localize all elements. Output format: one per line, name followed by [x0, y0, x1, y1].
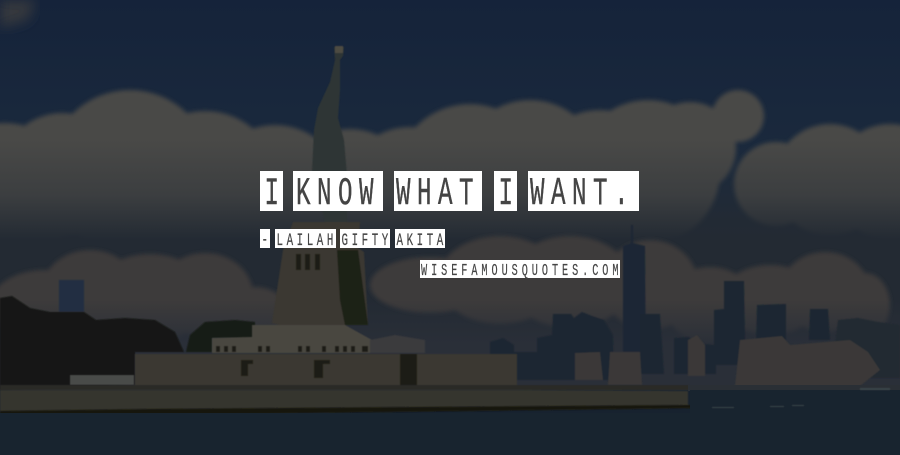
- upper cloud bank: [0, 90, 764, 267]
- website watermark: WISEFAMOUSQUOTES.COM: [421, 262, 622, 281]
- pale waterfront buildings: [575, 335, 880, 386]
- harbor strip beneath the skyline: [688, 385, 900, 391]
- quote word: I: I: [264, 172, 279, 216]
- lower middle cloud: [370, 236, 698, 330]
- author attribution: [260, 229, 447, 251]
- star fort wall: [135, 354, 517, 387]
- background: upper clouds: [0, 90, 900, 267]
- quote word: KNOW: KNOW: [296, 172, 380, 216]
- statue figure and torch: [312, 47, 347, 222]
- mid sky band beneath the upper clouds: [0, 240, 900, 390]
- lower cloud base shading: [0, 300, 900, 345]
- distant skyline: [59, 225, 900, 386]
- author word: GIFTY: GIFTY: [342, 232, 392, 251]
- quote word: I: [494, 171, 517, 216]
- quote word: WANT.: WANT.: [530, 172, 635, 216]
- cloud base shading: [0, 140, 900, 240]
- quote word: I: [260, 171, 283, 216]
- one world trade tower: [623, 225, 646, 372]
- terrace windows: [216, 346, 368, 352]
- background: lower clouds: [0, 236, 890, 343]
- lower left cloud: [0, 250, 290, 343]
- quote word: I: I: [498, 172, 513, 216]
- top-left wisp: [0, 0, 36, 28]
- water: [0, 413, 900, 455]
- right water: [690, 390, 900, 414]
- embankment shadow: [0, 405, 705, 415]
- statue of liberty: [135, 46, 517, 387]
- left glass tower: [59, 280, 84, 312]
- quote word: WHAT: WHAT: [396, 172, 480, 216]
- shore and embankment: [0, 390, 690, 414]
- midtown towers: [714, 281, 830, 365]
- quote text: [260, 171, 639, 216]
- pale buses by the shore: [70, 375, 134, 385]
- trees on the left: [0, 296, 184, 390]
- monument upper terrace: [212, 325, 380, 353]
- pedestal windows: [296, 254, 320, 270]
- right cloud: [734, 124, 900, 240]
- pedestal shaded side: [337, 250, 368, 325]
- horizon haze: [0, 345, 900, 390]
- wall shadow niches: [241, 354, 417, 387]
- crowd strip below the fort: [0, 385, 690, 390]
- background: sky: [0, 0, 900, 242]
- author dash: [260, 229, 270, 251]
- far-right towers: [835, 318, 900, 378]
- author word: AKITA: AKITA: [396, 232, 447, 251]
- torch flame: [335, 46, 343, 53]
- author word: LAILAH: LAILAH: [276, 232, 337, 251]
- lower right cloud: [665, 252, 890, 343]
- author dash: -: [262, 231, 268, 251]
- water foam highlights: [712, 388, 890, 408]
- trees behind the monument: [186, 320, 255, 352]
- buildings beside the tower: [490, 312, 716, 380]
- side of terrace: [370, 335, 425, 353]
- upper pedestal: [272, 222, 368, 325]
